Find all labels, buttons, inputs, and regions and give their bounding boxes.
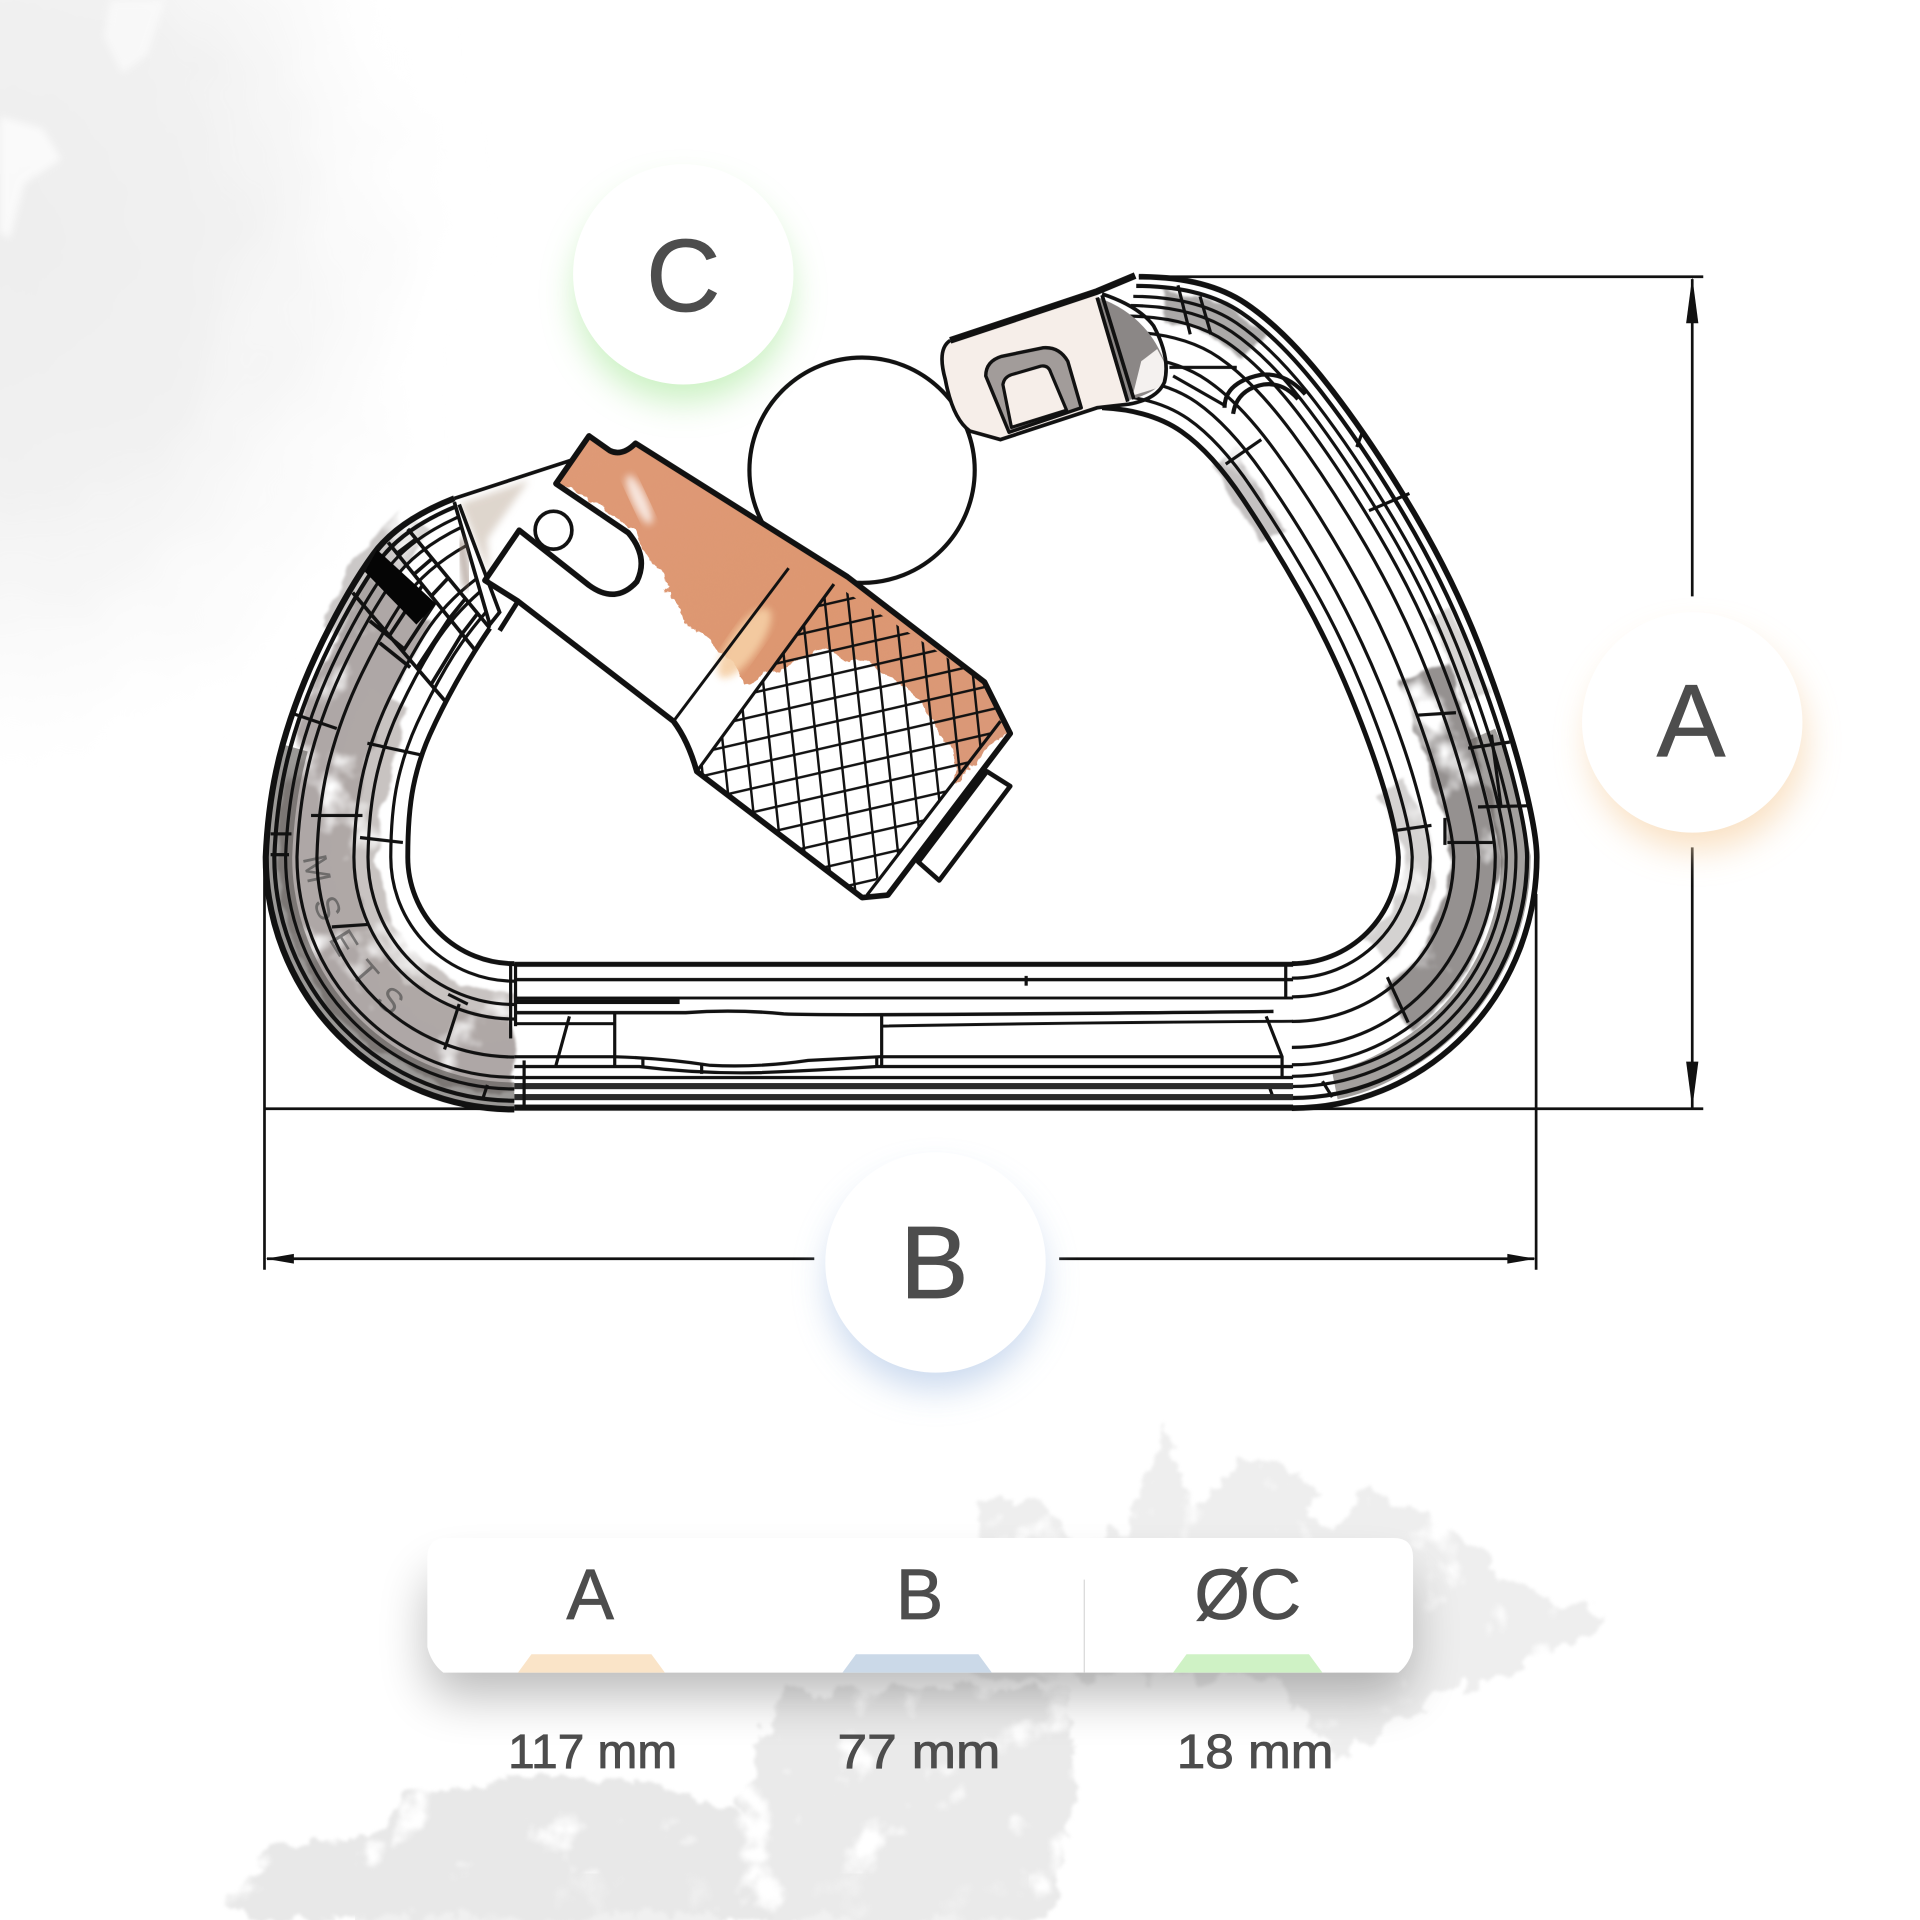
dark outer band: left bbox=[280, 748, 514, 1095]
dark outer band: right bbox=[1335, 735, 1516, 1085]
cross ticks bbox=[1169, 285, 1529, 1098]
gate: band line bbox=[673, 568, 789, 721]
dimensions table card bbox=[427, 1538, 1413, 1696]
watercolor wash: right arm bbox=[1161, 306, 1476, 1009]
column A heading: A bbox=[567, 1556, 615, 1635]
nose hook bbox=[942, 276, 1167, 440]
ladder rails and bars bbox=[353, 529, 490, 700]
gate: knurled grip bbox=[700, 592, 1000, 890]
badge C bbox=[573, 164, 793, 402]
color tab B bbox=[842, 1654, 992, 1673]
hook shaded wedge bbox=[1098, 298, 1166, 400]
column C heading: ØC bbox=[1194, 1556, 1301, 1635]
neck triangle and top edge bbox=[454, 460, 571, 624]
value C: 18 mm bbox=[1177, 1726, 1333, 1779]
dimension lines bbox=[264, 277, 1703, 1270]
badge B bbox=[825, 1152, 1046, 1390]
badge A: A bbox=[1657, 664, 1726, 779]
black marker block bbox=[365, 550, 436, 624]
column B heading: B bbox=[896, 1556, 943, 1635]
carabiner body bbox=[262, 194, 1822, 1779]
background smoke: top left bbox=[0, 0, 612, 759]
left arm contour lines bbox=[266, 498, 514, 1109]
gate: outline bbox=[485, 436, 1029, 918]
cross ticks bbox=[271, 714, 487, 1100]
right arm contour lines bbox=[1102, 277, 1537, 1108]
gate: knurl edges bbox=[697, 584, 1000, 895]
value B: 77 mm bbox=[838, 1726, 1000, 1779]
value A: 117 mm bbox=[508, 1726, 677, 1779]
gate: sleeve tab bbox=[918, 771, 1010, 880]
badge A bbox=[1582, 612, 1805, 850]
badge C: C bbox=[646, 218, 720, 333]
background smoke: bottom bbox=[220, 1427, 1604, 1920]
arrowheads bbox=[266, 277, 1698, 1264]
gate-seat slot bbox=[1224, 374, 1305, 414]
gate: orange wash bbox=[560, 440, 1007, 784]
color tab A bbox=[518, 1654, 665, 1673]
gate: neck strut bbox=[500, 601, 518, 631]
gate: pin hole bbox=[535, 511, 572, 549]
bottom bar lines bbox=[511, 964, 1293, 1108]
badge B: B bbox=[900, 1205, 969, 1320]
circle showing gate opening C bbox=[749, 358, 975, 583]
watercolor wash: left arm bbox=[317, 520, 514, 1057]
embossed lettering: MSETS bbox=[303, 855, 403, 1012]
color tab C bbox=[1173, 1654, 1322, 1673]
hook window bbox=[986, 348, 1081, 432]
